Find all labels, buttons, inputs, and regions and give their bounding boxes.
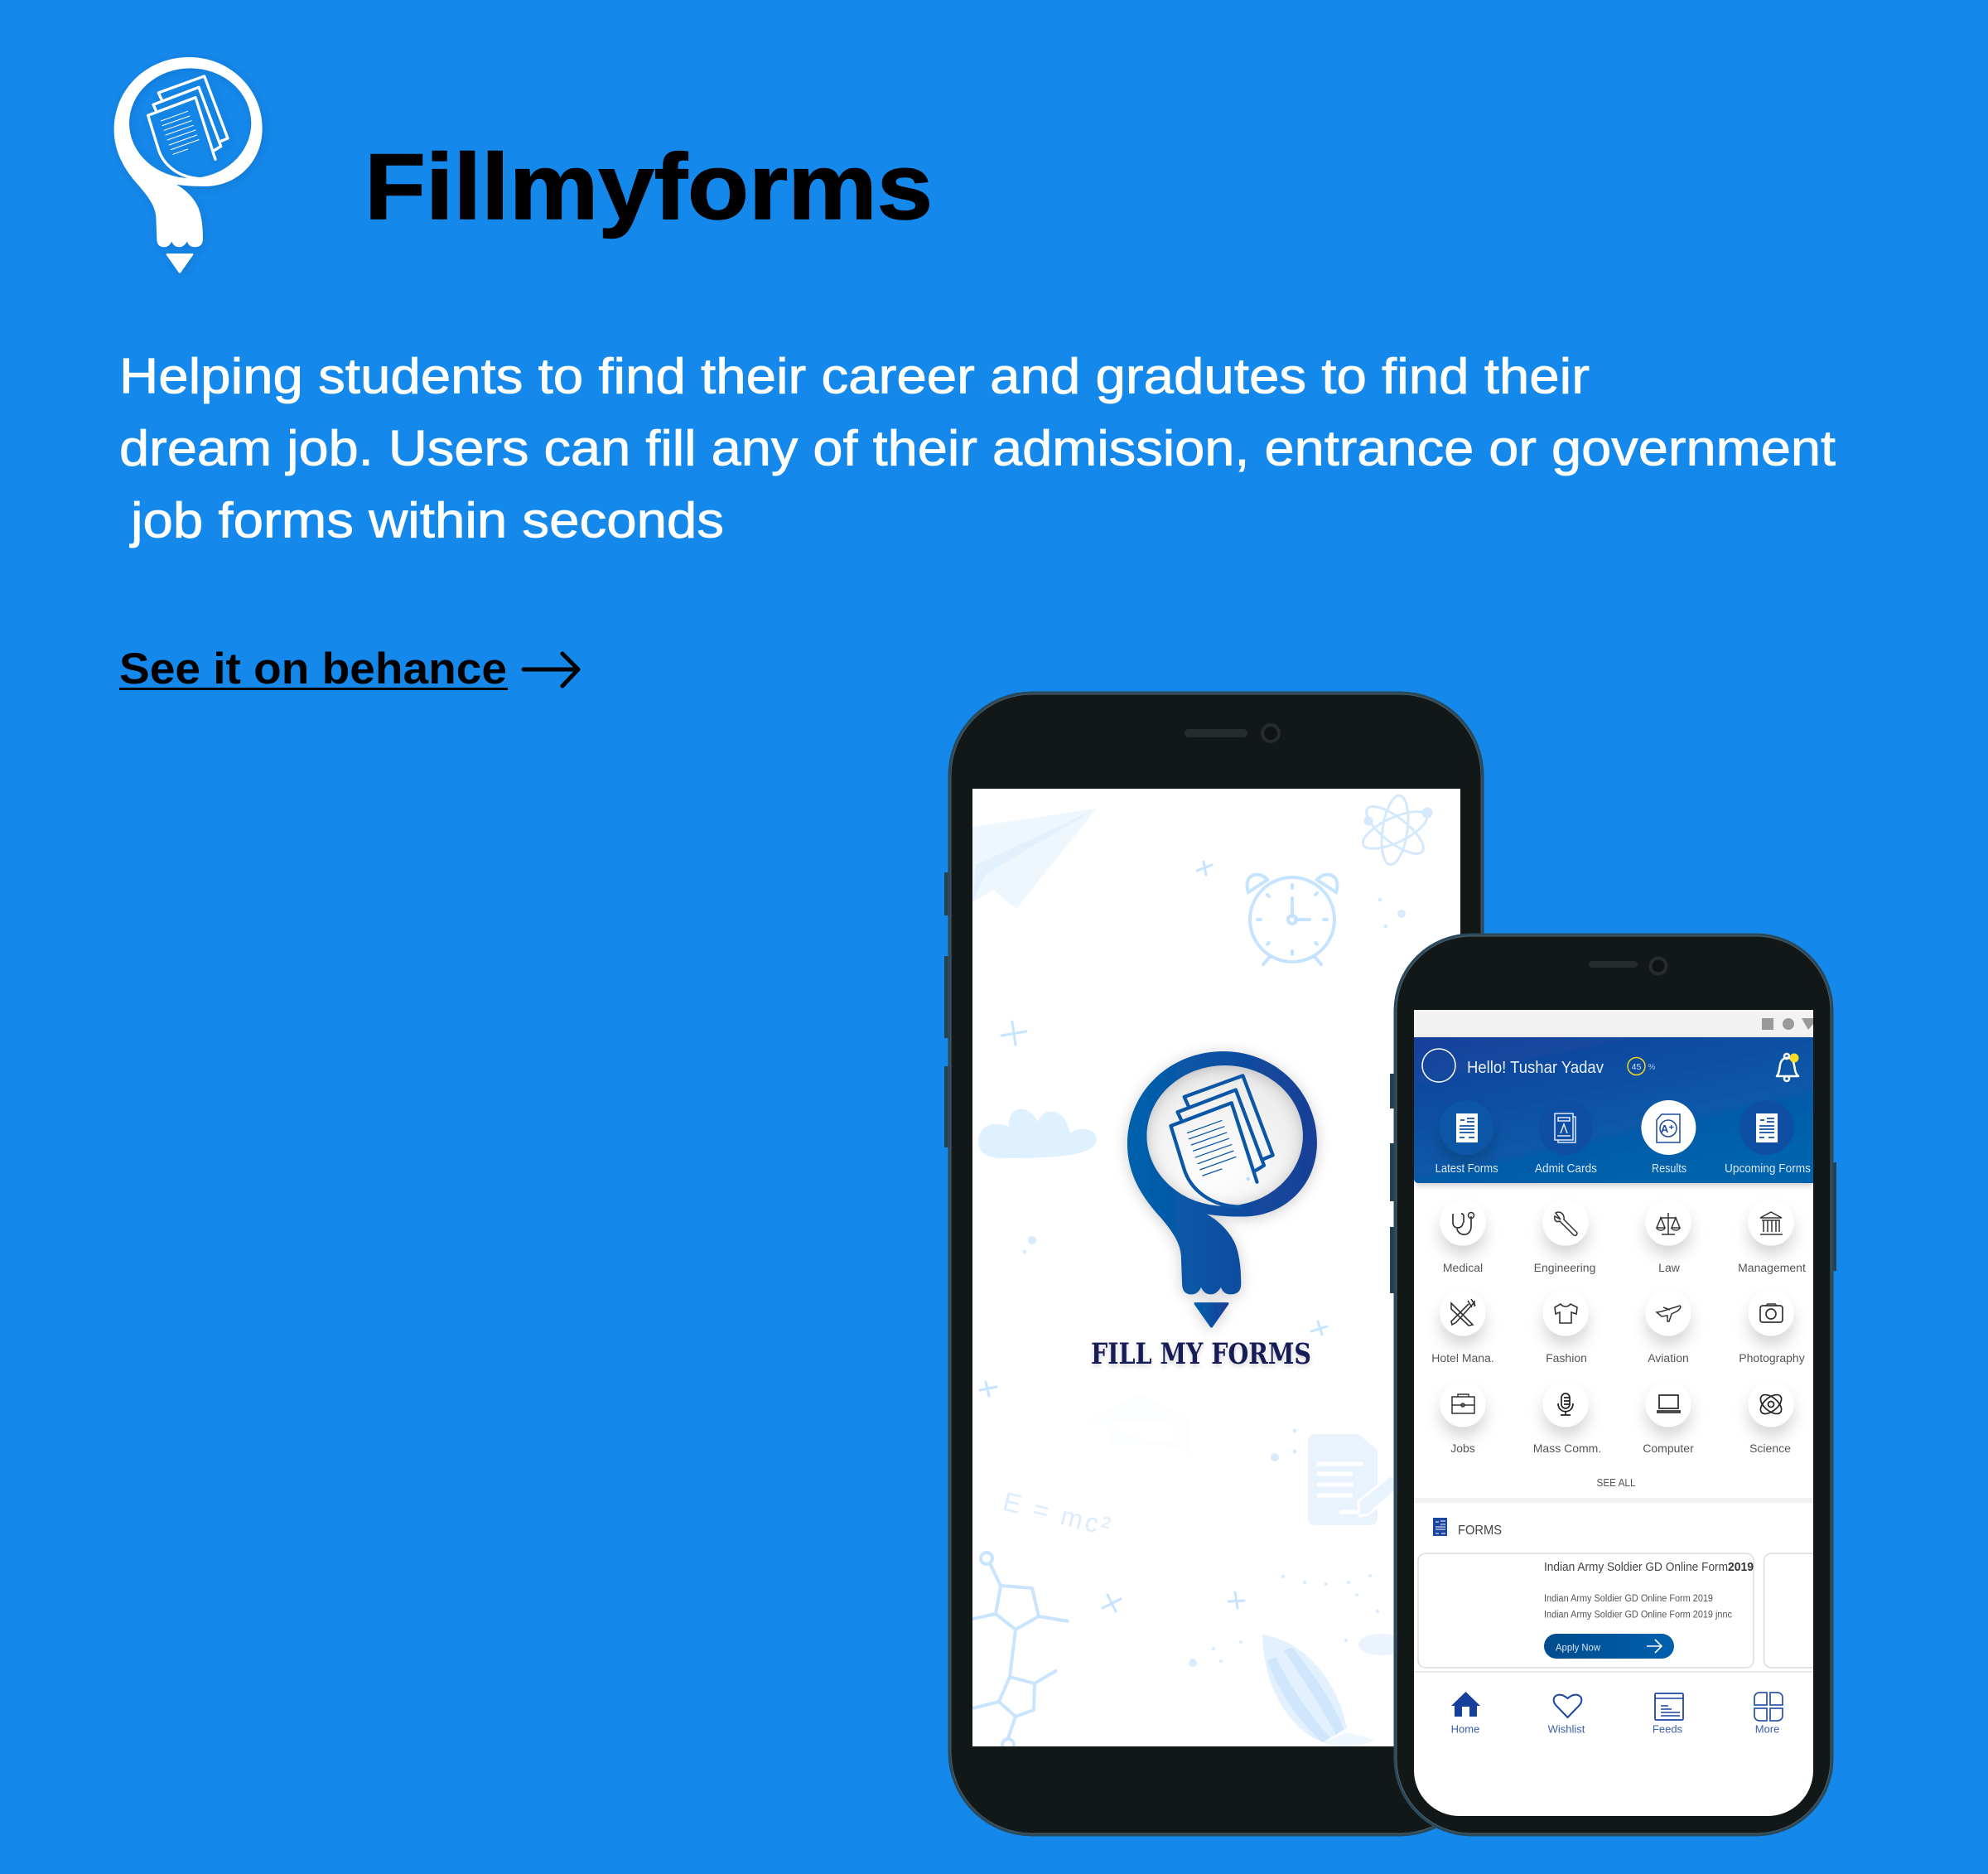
category: management: Management: [1738, 1261, 1806, 1274]
category: fashion: Fashion: [1546, 1351, 1587, 1364]
category: engineering: Engineering: [1534, 1261, 1595, 1274]
nav: feeds: Feeds: [1653, 1723, 1683, 1735]
formula: E = mc2: E = mc²: [1000, 1486, 1113, 1542]
icon: alarm clock: [1247, 875, 1337, 964]
forms heading: FORMS: [1458, 1524, 1502, 1538]
category: medical: Medical: [1443, 1261, 1483, 1274]
app screen: [1414, 1010, 1839, 1816]
category: science: [1748, 1382, 1794, 1455]
icon: feather: [1262, 1635, 1375, 1746]
progress badge: %: [1648, 1063, 1656, 1072]
progress badge: [1628, 1057, 1656, 1075]
category: aviation: [1645, 1291, 1691, 1364]
see all link: SEE ALL: [1597, 1476, 1635, 1489]
card: form listing: [1418, 1553, 1754, 1668]
tab: latest forms: Latest Forms: [1436, 1162, 1498, 1176]
nav: home: [1451, 1692, 1480, 1735]
tab: latest forms: [1436, 1113, 1498, 1172]
category: fashion: [1542, 1291, 1589, 1364]
nav: wishlist: Wishlist: [1548, 1723, 1585, 1735]
phone side buttons: [1390, 1074, 1836, 1293]
category grid: [1431, 1200, 1806, 1489]
speaker: [1185, 729, 1247, 737]
description text: dream job. Users can fill any of their admission, entrance or government: [119, 421, 1836, 476]
phone body: [1395, 935, 1832, 1835]
phone: dashboard: [1390, 935, 1839, 1835]
card lines: Indian Army Soldier GD Online Form 2019: [1544, 1594, 1713, 1604]
tab: results: Results: [1652, 1162, 1686, 1176]
phone side buttons: [944, 872, 949, 1147]
phone body: [949, 693, 1483, 1835]
icon: faint ellipse: [1358, 1634, 1393, 1655]
tab: admit cards: Admit Cards: [1535, 1162, 1597, 1176]
category: aviation: Aviation: [1648, 1351, 1689, 1364]
nav: more: [1754, 1693, 1783, 1735]
category: mass communication: Mass Comm.: [1533, 1442, 1601, 1455]
link: see it on behance: See it on behance: [119, 645, 507, 693]
category: hotel management: Hotel Mana.: [1431, 1351, 1494, 1364]
icon: paper plane: [972, 809, 1097, 909]
camera: [1650, 958, 1667, 974]
icon: cloud: [978, 1109, 1097, 1158]
category: hotel management: [1432, 1299, 1493, 1362]
category: computer: Computer: [1643, 1442, 1694, 1455]
icon: graduation cap: [1090, 1395, 1189, 1454]
category: photography: [1740, 1303, 1805, 1364]
bottom navigation: [1451, 1692, 1783, 1735]
icon: molecule: [972, 1553, 1069, 1751]
button: apply now: [1544, 1634, 1674, 1659]
section divider: [1414, 1498, 1813, 1503]
header panel: [1414, 1037, 1813, 1183]
camera: [1262, 725, 1279, 741]
status bar: [1414, 1010, 1813, 1037]
category: jobs: [1440, 1382, 1486, 1455]
category: management: [1739, 1211, 1806, 1274]
card lines: Indian Army Soldier GD Online Form 2019 jnnc: [1544, 1611, 1732, 1620]
card lines: [1544, 1594, 1732, 1620]
category: mass communication: [1534, 1393, 1600, 1452]
category: law: [1645, 1200, 1691, 1274]
card: partial next: [1764, 1553, 1839, 1668]
category: science: Science: [1749, 1442, 1791, 1455]
tab: upcoming forms: Upcoming Forms: [1725, 1162, 1811, 1176]
speaker: [1589, 961, 1638, 968]
arrow: link: [524, 654, 578, 686]
phone: splash screen: [944, 693, 1483, 1835]
nav: home: Home: [1451, 1723, 1479, 1735]
description text: job forms within seconds: [129, 492, 724, 548]
description text: Helping students to find their career and gradutes to find their: [119, 348, 1590, 404]
tab: admit cards: [1534, 1113, 1597, 1172]
nav divider: [1414, 1671, 1813, 1673]
greeting: Hello! Tushar Yadav: [1467, 1059, 1604, 1077]
avatar: [1422, 1049, 1455, 1082]
nav: wishlist: [1548, 1695, 1585, 1735]
nav: more: More: [1755, 1723, 1779, 1735]
icon: atom: [1358, 794, 1431, 867]
category: photography: Photography: [1739, 1351, 1805, 1364]
splash screen: [972, 789, 1460, 1751]
tab: upcoming forms: [1725, 1100, 1811, 1176]
category: medical: [1440, 1200, 1486, 1274]
card title: Indian Army Soldier GD Online Form2019: [1544, 1560, 1754, 1574]
nav: feeds: [1653, 1693, 1683, 1735]
splash title: FILL MY FORMS: [1091, 1338, 1311, 1371]
tab: results: A⁺: [1661, 1123, 1674, 1135]
decorative dots: [1022, 898, 1406, 1667]
logo: blue lightbulb pencil: [1127, 1051, 1317, 1328]
icon: document with pencil: [1308, 1434, 1400, 1525]
title: Fillmyforms: [364, 135, 933, 239]
description text: [119, 348, 1836, 548]
category: engineering: [1534, 1211, 1595, 1274]
category: law: Law: [1658, 1261, 1681, 1274]
icon: notification bell: [1777, 1054, 1799, 1081]
button: apply now: Apply Now: [1556, 1642, 1600, 1654]
category: computer: [1643, 1382, 1694, 1455]
icons: plus signs: [980, 862, 1327, 1611]
progress badge: 45: [1632, 1062, 1641, 1072]
logo: white lightbulb pencil: [114, 57, 263, 273]
tab: results: [1641, 1100, 1696, 1176]
forms heading: [1433, 1518, 1502, 1538]
category: jobs: Jobs: [1450, 1442, 1475, 1455]
